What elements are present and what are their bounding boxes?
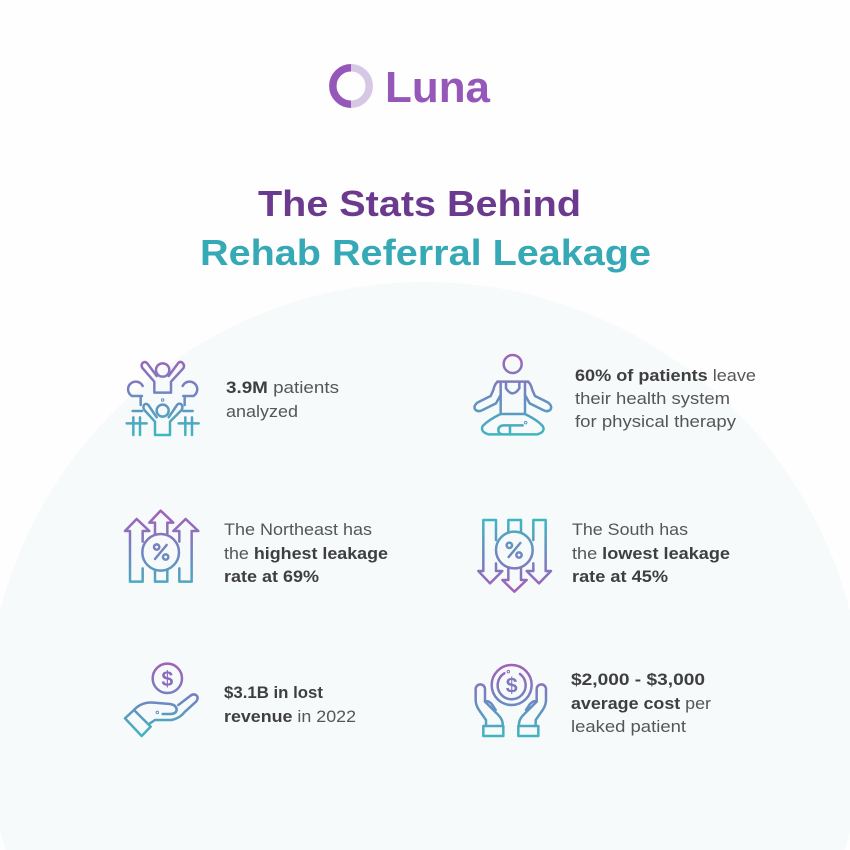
text: lost revenue: $3.1B in lost <box>224 683 323 702</box>
title: The Stats Behind <box>258 183 581 224</box>
text: 60% of patients: their health system <box>575 389 730 408</box>
text: patients analyzed <box>226 378 339 421</box>
text: average cost: $2,000 - $3,000 <box>571 670 705 689</box>
icon: two hands with coin: $ <box>506 674 518 698</box>
text: South leakage <box>572 520 730 586</box>
text: patients analyzed: 3.9M patients <box>226 378 339 397</box>
text: patients analyzed: analyzed <box>226 402 298 421</box>
text: 60% of patients: 60% of patients leave <box>575 366 756 385</box>
icon: hand with coin: $ <box>161 667 173 691</box>
text: South leakage: the lowest leakage <box>572 544 730 563</box>
logo wordmark: Luna <box>385 63 491 112</box>
text: lost revenue: revenue in 2022 <box>224 707 356 726</box>
title: Rehab Referral Leakage <box>200 232 651 273</box>
text: average cost: average cost per <box>571 694 711 713</box>
title <box>200 183 651 273</box>
text: Northeast leakage: rate at 69% <box>224 567 319 586</box>
icon: arrows down with percent <box>478 520 551 592</box>
text: South leakage: rate at 45% <box>572 567 668 586</box>
logo: Luna <box>333 63 491 112</box>
icon: group of people <box>127 362 199 435</box>
icon: arrows up with percent <box>125 511 198 582</box>
text: lost revenue <box>224 683 356 726</box>
text: average cost <box>571 670 711 736</box>
icon: two hands with coin <box>476 665 546 736</box>
text: Northeast leakage: The Northeast has <box>224 520 372 539</box>
text: 60% of patients <box>575 366 756 431</box>
text: Northeast leakage: the highest leakage <box>224 544 388 563</box>
icon: hand with coin <box>125 664 198 736</box>
text: Northeast leakage <box>224 520 388 586</box>
text: average cost: leaked patient <box>571 717 686 736</box>
text: South leakage: The South has <box>572 520 688 539</box>
logo ring <box>333 68 369 104</box>
text: 60% of patients: for physical therapy <box>575 412 737 431</box>
icon: meditating person <box>475 355 551 434</box>
